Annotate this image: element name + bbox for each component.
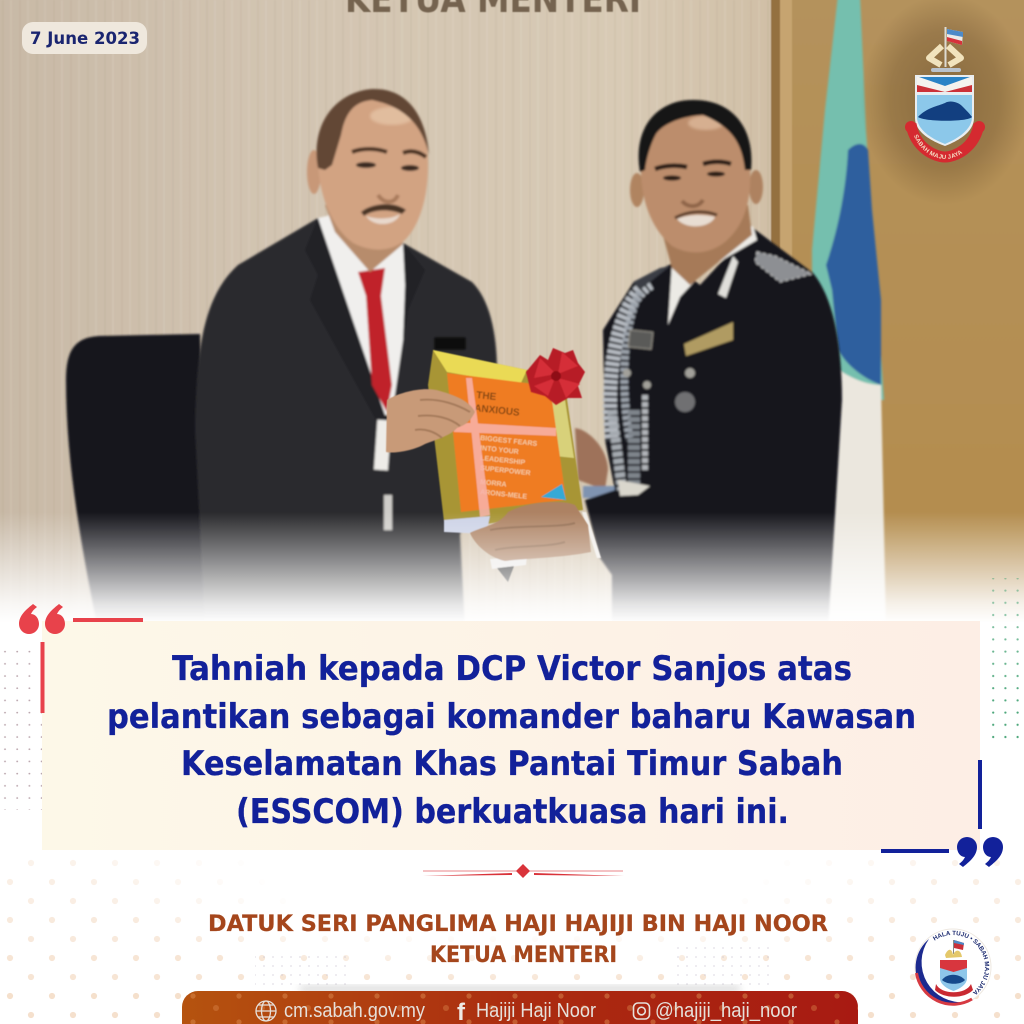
man on right: DCP Victor Sanjos <box>575 100 842 630</box>
quote text: pelantikan sebagai komander baharu Kawasan <box>107 697 916 737</box>
footer bar <box>182 991 858 1024</box>
book title lines: MORRA <box>480 479 507 489</box>
head <box>641 102 750 252</box>
icon: opening quotation mark <box>19 604 65 634</box>
motto text: SABAH MAJU JAYA <box>914 134 962 159</box>
background dots: lower section <box>0 578 1024 1024</box>
nose shade <box>682 200 703 206</box>
forehead highlight <box>370 107 414 125</box>
facebook name: Hajiji Haji Noor <box>476 1000 596 1022</box>
medal ribbon <box>684 322 733 356</box>
lower hand <box>470 502 591 561</box>
panel: quote background <box>42 621 980 850</box>
attribution: name and title: DATUK SERI PANGLIMA HAJI HAJIJI BIN HAJI NOOR <box>208 911 828 937</box>
left shoulder strap <box>633 266 670 290</box>
brows <box>352 149 426 157</box>
motto ribbon <box>911 124 979 157</box>
jacket lapel shading <box>406 248 407 293</box>
neck <box>660 205 752 285</box>
blue corner <box>541 484 566 500</box>
instagram handle: @hajiji_haji_noor <box>655 1000 797 1022</box>
collar insignia <box>718 256 738 298</box>
uniform <box>585 228 842 630</box>
moustache and smile <box>677 215 715 226</box>
office chair <box>66 334 210 630</box>
upper hand <box>386 389 475 453</box>
date badge: 7 June 2023 <box>30 29 140 48</box>
icon: Sabah coat of arms <box>870 7 1020 194</box>
wrapping paper <box>428 350 583 530</box>
accent line: bottom right horizontal <box>881 849 949 853</box>
photo fade to white <box>0 512 1024 627</box>
book title lines: LEADERSHIP <box>480 455 526 467</box>
moustache <box>361 204 406 216</box>
orange book cover <box>447 373 566 512</box>
book title lines: INTO YOUR <box>480 445 519 456</box>
ornament divider <box>423 864 624 878</box>
icon: globe <box>256 1001 276 1021</box>
name tag <box>628 330 653 349</box>
book title lines <box>474 390 538 501</box>
gift: wrapped package with book <box>428 350 601 558</box>
hair <box>317 89 429 170</box>
icon: Hala Tuju logo <box>914 928 992 1006</box>
icon: closing quotation mark <box>957 837 1003 867</box>
brows <box>655 162 731 169</box>
quote text: (ESSCOM) berkuatkuasa hari ini. <box>236 792 789 832</box>
eyes <box>663 175 681 181</box>
aiguillette cord <box>610 283 650 440</box>
ears <box>630 173 644 207</box>
attribution: name and title: KETUA MENTERI <box>430 942 617 968</box>
accent line: left vertical <box>40 642 44 713</box>
book title lines: THE <box>476 390 497 403</box>
book title lines: BIGGEST FEARS <box>480 435 538 448</box>
date badge <box>22 22 147 54</box>
clasped hands over gift <box>386 389 591 582</box>
shirt <box>318 214 405 415</box>
shoulder epaulette <box>755 252 812 282</box>
eyes <box>356 162 376 168</box>
footer shadow <box>300 986 740 992</box>
accent line: right vertical <box>978 760 982 829</box>
ribbon <box>452 378 556 517</box>
shirt collar <box>668 226 757 325</box>
logo mini emblem <box>935 940 973 997</box>
tassel <box>612 395 645 490</box>
phone pocket <box>434 337 466 350</box>
white cuff <box>374 420 391 470</box>
buttons <box>623 368 695 412</box>
forehead highlight <box>688 116 724 130</box>
quote text <box>107 649 916 832</box>
accent line: top left horizontal <box>73 618 143 622</box>
logo lettering: HALA TUJU • SABAH MAJU JAYA <box>932 930 990 994</box>
far cuff <box>583 486 615 498</box>
ear <box>307 150 321 194</box>
photo: Chief Minister presenting a gift <box>0 0 1024 640</box>
book title lines: ARONS-MELE <box>480 489 528 501</box>
attribution: name and title <box>208 911 828 968</box>
man on left: Datuk Seri Hajiji <box>195 89 497 630</box>
photo backdrop: office wall <box>0 0 1024 640</box>
book title lines: SUPERPOWER <box>480 465 531 477</box>
hair <box>639 100 751 172</box>
tie <box>358 268 392 412</box>
quote text: Keselamatan Khas Pantai Timur Sabah <box>181 744 843 784</box>
far hand <box>575 428 608 490</box>
quote text: Tahniah kepada DCP Victor Sanjos atas <box>172 649 852 689</box>
logo crescents <box>916 939 966 1005</box>
head <box>318 91 428 250</box>
lower cuff <box>490 556 527 569</box>
nose shade <box>378 195 398 202</box>
smile <box>366 214 400 224</box>
flag on stand <box>812 0 886 630</box>
suit <box>195 218 497 630</box>
neck <box>325 205 410 272</box>
icon: instagram <box>634 1003 650 1019</box>
book title lines: ANXIOUS <box>474 403 520 419</box>
crest with flag <box>929 27 963 72</box>
gift bow <box>526 348 585 405</box>
shield <box>915 75 974 146</box>
website: cm.sabah.gov.my <box>284 1000 425 1022</box>
gift white edge <box>582 512 601 558</box>
